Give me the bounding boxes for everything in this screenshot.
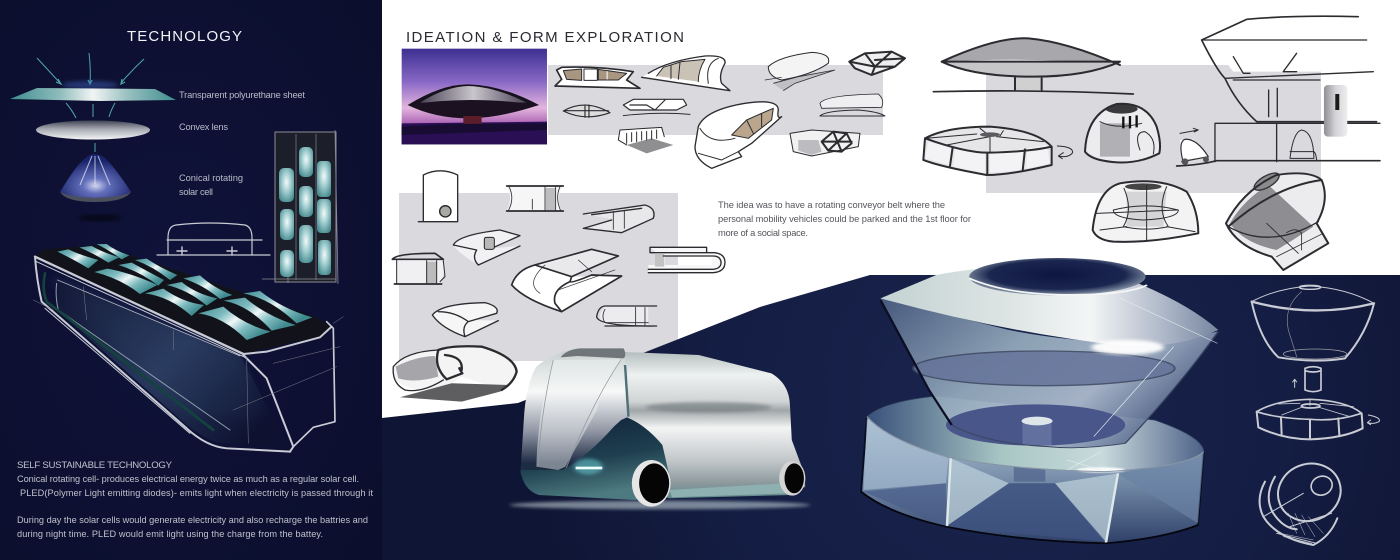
sketch: side u-shape right (648, 247, 725, 273)
base cylinder side (861, 417, 1204, 543)
grey backdrop: building sketches (986, 65, 1321, 193)
sketch: bowl (1252, 285, 1374, 361)
panel: technology dark background (0, 0, 382, 560)
sketch: small lens pod (563, 105, 610, 117)
render: rotating pavilion (861, 258, 1218, 543)
sketch: dome (1085, 104, 1160, 163)
sketch: angled shelf with post (583, 205, 654, 233)
sketch: curved bench with post (453, 230, 520, 265)
central column (1023, 422, 1052, 445)
lower sill (670, 483, 791, 497)
sketch: pod front view (555, 67, 640, 88)
sketch: large pod (695, 102, 782, 168)
rear wheel (779, 461, 805, 496)
floor disc lower (946, 404, 1125, 446)
vehicle front face (520, 348, 628, 483)
roof (35, 245, 332, 354)
paragraph: idea description (718, 200, 971, 238)
sketches: building form studies (923, 16, 1380, 270)
text block: self sustainable technology: SELF SUSTAINABLE TECHNOLOGY (17, 460, 173, 471)
sketch: upright panel (418, 171, 458, 222)
paragraph: idea description: more of a social space. (718, 228, 808, 238)
sketch: bold curled form (393, 346, 517, 402)
glass bowl (880, 298, 1217, 447)
paragraph: idea description: The idea was to have a rotating conveyor belt where the (718, 200, 945, 210)
sketch: saucer building (933, 38, 1133, 94)
sketch: tilted bowl (1226, 170, 1328, 270)
photo: saucer building at dusk (402, 49, 547, 144)
label: conical solar cell: Conical rotating (179, 173, 243, 183)
sketch: lattice gem (849, 52, 905, 75)
label: conical solar cell (179, 173, 243, 197)
sketch: connecting cylinder (1305, 367, 1321, 392)
sketches: exploded pavilion in white line (1252, 285, 1379, 545)
text block: self sustainable technology: During day the solar cells would generate electricity and also recharge the battries and (17, 515, 368, 525)
label: convex lens: Convex lens (179, 122, 228, 132)
render: shuttle vehicle (510, 348, 810, 509)
ground glow (510, 501, 810, 509)
text block: self sustainable technology: PLED(Polymer Light emitting diodes)- emits light when electricity is passed through it (20, 488, 373, 498)
convex lens (36, 120, 150, 140)
sketch: tilted assembly (1260, 455, 1349, 545)
sketch: concave frame (507, 186, 563, 211)
heading: ideation and form exploration: IDEATION & FORM EXPLORATION (406, 29, 684, 46)
text block: self sustainable technology: Conical rotating cell- produces electrical energy twice as much as a regular solar cell. (17, 474, 359, 484)
sketch: rounded lounger (432, 303, 498, 337)
sketch: disk (1257, 399, 1379, 439)
sketch: winged pod (642, 56, 730, 91)
vehicle side body (616, 352, 805, 498)
sketch: lower dome (1093, 181, 1198, 242)
sketch: section of building (1202, 16, 1380, 162)
sketch: rotating disk (923, 127, 1073, 175)
top opening (969, 258, 1146, 295)
floor disc upper (913, 351, 1175, 386)
front light (574, 459, 603, 475)
opaque upper shell (880, 266, 1218, 346)
roof visor (561, 348, 625, 358)
heading: technology: TECHNOLOGY (127, 28, 242, 45)
A-pillar seam (625, 365, 628, 417)
sketch: side box (392, 253, 445, 284)
label: conical solar cell: solar cell (179, 187, 213, 197)
shelter side glass (56, 280, 290, 448)
text block: self sustainable technology (17, 460, 373, 539)
paragraph: idea description: personal mobility vehicles could be parked and the 1st floor for (718, 214, 971, 224)
front wheel (632, 460, 671, 507)
pavilion outline (861, 298, 1218, 543)
sketch: small mobility pod on ramp (1177, 128, 1380, 166)
sketch: large curled shelter (512, 249, 622, 312)
solar cells on roof (57, 244, 312, 340)
diagram: small cross-section sketch (157, 223, 270, 255)
sketch: small u-shape (597, 306, 657, 326)
base panels (864, 418, 1204, 543)
sketches: curled form exploration (392, 171, 725, 402)
sketch: capsule pod (765, 52, 835, 91)
sketch: ribbed shelter (618, 127, 673, 153)
sketch: angular pod (623, 99, 690, 116)
polyurethane sheet (10, 88, 176, 101)
sketch: pod with lattice end (790, 130, 860, 156)
side crease shadow (645, 402, 771, 413)
sketch: flat pod right (820, 94, 885, 116)
icon: up arrow (1293, 379, 1297, 387)
bus shelter sketch with solar roof (33, 244, 343, 452)
text block: self sustainable technology: during night time. PLED would emit light using the charge from the battey. (17, 529, 323, 539)
shelter sketch outline (33, 257, 343, 452)
front pillar highlight (536, 359, 621, 470)
shelter glow (50, 277, 260, 417)
arrows: incoming light (37, 53, 144, 152)
conical solar cell (60, 154, 131, 202)
white centre spot (1022, 417, 1053, 425)
grey backdrop: ideation sketches lower (399, 193, 678, 361)
base top surface (867, 396, 1204, 472)
teal wheel arch (520, 417, 670, 500)
sketches: vehicle ideation row (555, 52, 905, 168)
grey backdrop: ideation sketches top (548, 65, 883, 135)
label: polyurethane sheet: Transparent polyurethane sheet (179, 90, 305, 100)
highlight flare (1091, 340, 1164, 355)
diagram: solar layers (10, 53, 176, 221)
solar panel strip (262, 130, 338, 284)
glow above sheet (62, 81, 118, 89)
panel: dark lower-right background (382, 275, 1400, 560)
cone shadow (78, 215, 122, 221)
